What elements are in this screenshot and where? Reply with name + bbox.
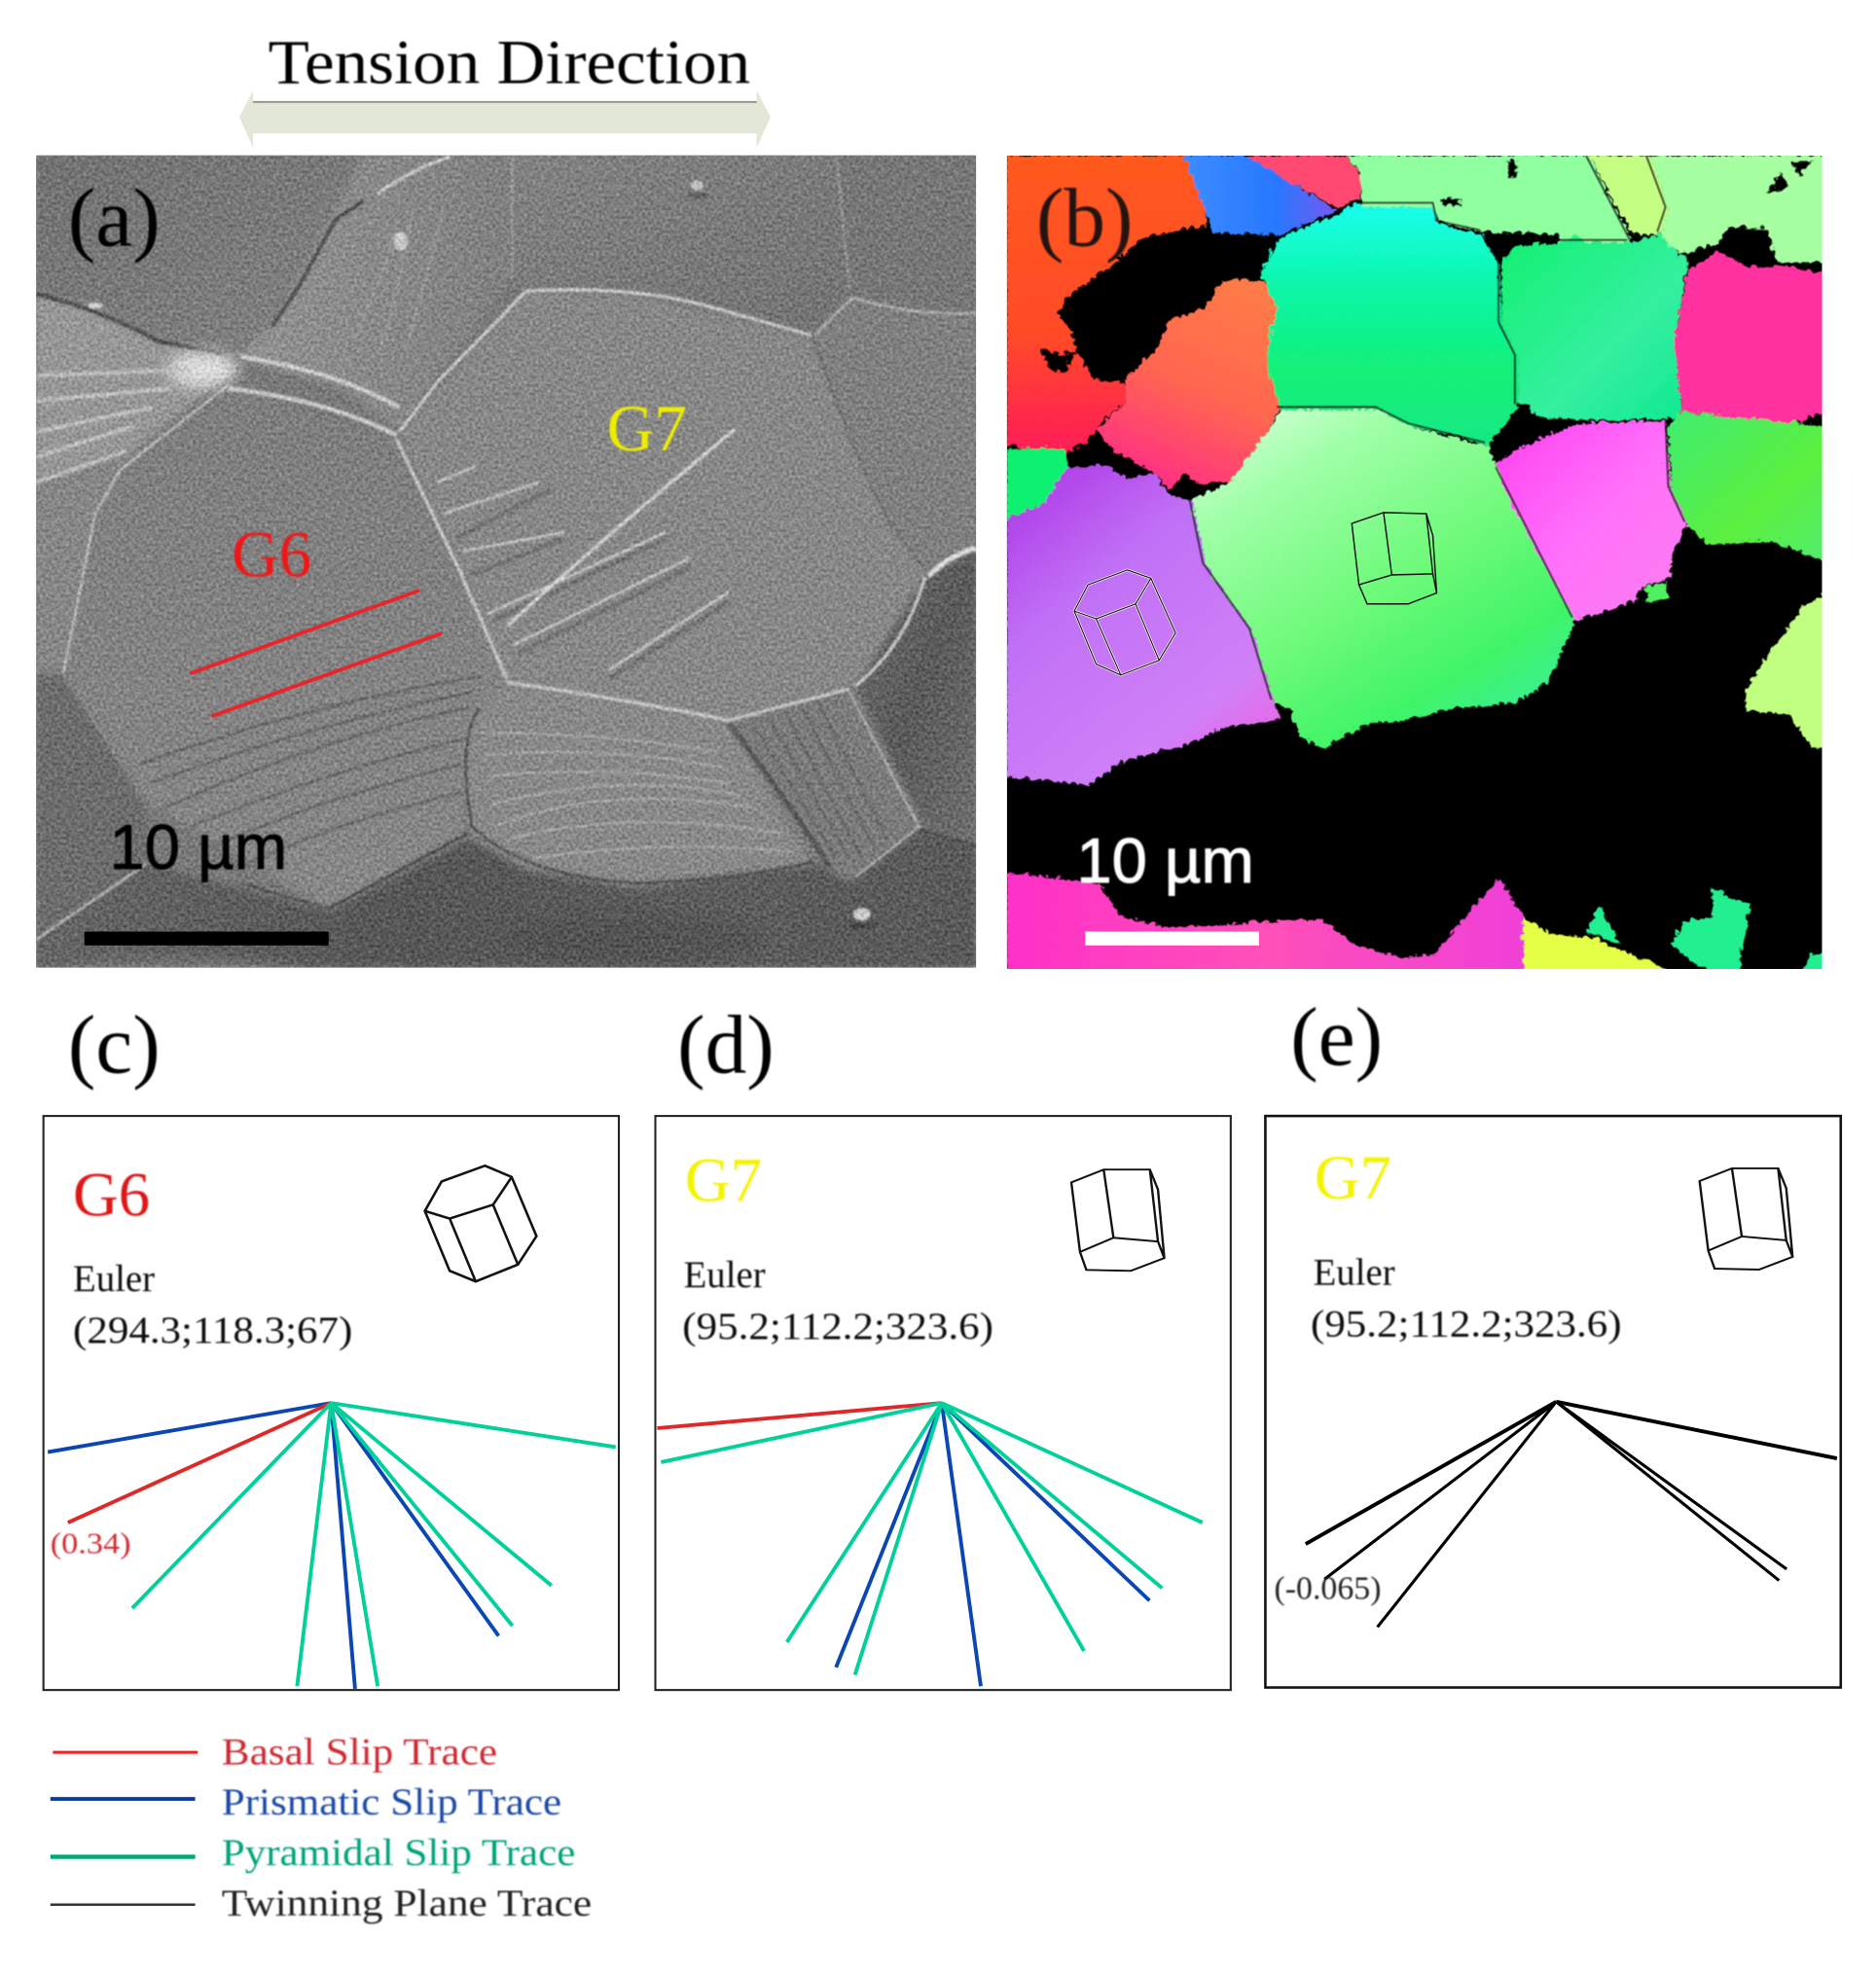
label: (a): (a): [68, 172, 161, 264]
legend item: basal: Basal Slip Trace: [222, 1731, 497, 1773]
panel: (d) G7 slip traces: [656, 1116, 1231, 1690]
icon: crystal prism G6: [425, 1165, 536, 1281]
panel: (a) SEM micrograph: [36, 156, 976, 993]
grain boundary detail: [1189, 156, 1684, 699]
boundaries: [36, 157, 976, 940]
text: Euler angles G7: (95.2;112.2;323.6): [1311, 1304, 1622, 1345]
label: (e): (e): [1290, 992, 1383, 1084]
text: Euler angles G7: (95.2;112.2;323.6): [682, 1306, 993, 1347]
label: G6 on SEM: G6: [232, 519, 311, 592]
slip trace lines on G6: [190, 591, 442, 716]
heading: G7: G7: [685, 1144, 762, 1214]
heading: G6: G6: [73, 1159, 150, 1229]
scale bar (b): [1085, 932, 1259, 946]
label: (d): (d): [677, 999, 775, 1091]
value: (0.34): (0.34): [51, 1526, 131, 1560]
panel: (e) G7 twinning plane traces: [1265, 1116, 1841, 1688]
text: Euler angles G6: Euler: [73, 1258, 155, 1300]
label: (b): (b): [1036, 172, 1134, 264]
crystal: purple grain prism: [1074, 570, 1175, 675]
icon: crystal prism G7: [1700, 1168, 1792, 1270]
surface bumps: [88, 180, 876, 929]
arrow: double-headed tension direction: [239, 90, 771, 147]
title: Tension Direction: Tension Direction: [269, 26, 750, 96]
heading: G7: G7: [1315, 1142, 1391, 1212]
scale bar (a): [85, 932, 329, 946]
legend item: pyramidal: Pyramidal Slip Trace: [222, 1832, 575, 1874]
twinning trace fan: [1306, 1402, 1837, 1627]
scale label: 10 µm (a): 10 µm: [110, 811, 287, 882]
crystal: green grain prism: [1352, 513, 1436, 604]
label: G7 on SEM: G7: [607, 392, 687, 465]
panel: (b) EBSD orientation map: [1003, 153, 1827, 974]
panel: (c) G6 slip traces: [44, 1116, 619, 1690]
legend item: twinning: Twinning Plane Trace: [222, 1882, 592, 1924]
text: Euler angles G6: (294.3;118.3;67): [73, 1309, 352, 1351]
slip trace fan G7: [657, 1403, 1203, 1686]
grain texture: [36, 156, 976, 968]
legend item: prismatic: Prismatic Slip Trace: [222, 1781, 561, 1823]
legend: [51, 1731, 592, 1924]
bright band and slip streaks: [36, 206, 887, 871]
text: Euler angles G7: Euler: [1314, 1251, 1395, 1293]
text: Euler angles G7: Euler: [684, 1254, 766, 1296]
slip trace fan G6: [48, 1403, 616, 1689]
scale label: 10 µm (b): 10 µm: [1076, 825, 1254, 896]
label: (c): (c): [68, 999, 161, 1091]
value: (-0.065): (-0.065): [1274, 1570, 1381, 1606]
icon: crystal prism G7: [1071, 1169, 1165, 1271]
